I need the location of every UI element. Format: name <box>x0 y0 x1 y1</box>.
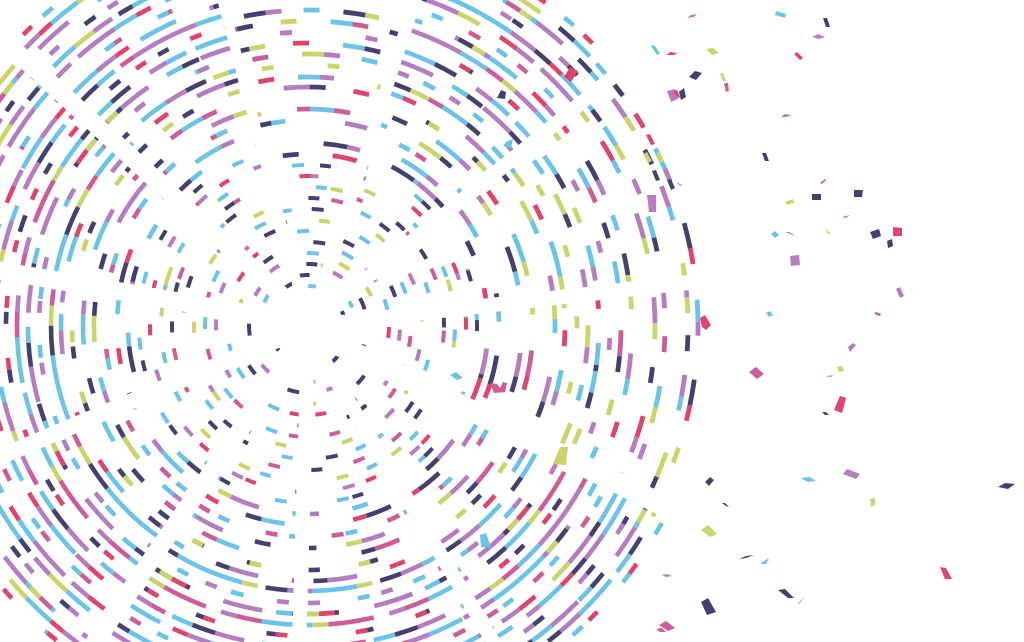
sector: top right rings <box>332 0 608 280</box>
sector: bottom left rings <box>111 388 300 642</box>
sector: left rings <box>0 280 252 442</box>
confetti: scattered pieces lower right <box>656 343 1015 632</box>
sector: right rings <box>362 290 700 489</box>
sector: top rings <box>234 8 398 289</box>
confetti: fragments inside the rings <box>450 67 711 548</box>
sector: top left rings <box>22 0 292 289</box>
sector: lower left rings <box>0 348 280 642</box>
sector: bottom right rings <box>306 380 485 642</box>
sector: upper left rings <box>0 64 270 304</box>
confetti: scattered pieces upper right <box>643 11 904 317</box>
sector: lower right rings <box>332 356 664 642</box>
sector: upper right rings <box>340 83 696 316</box>
